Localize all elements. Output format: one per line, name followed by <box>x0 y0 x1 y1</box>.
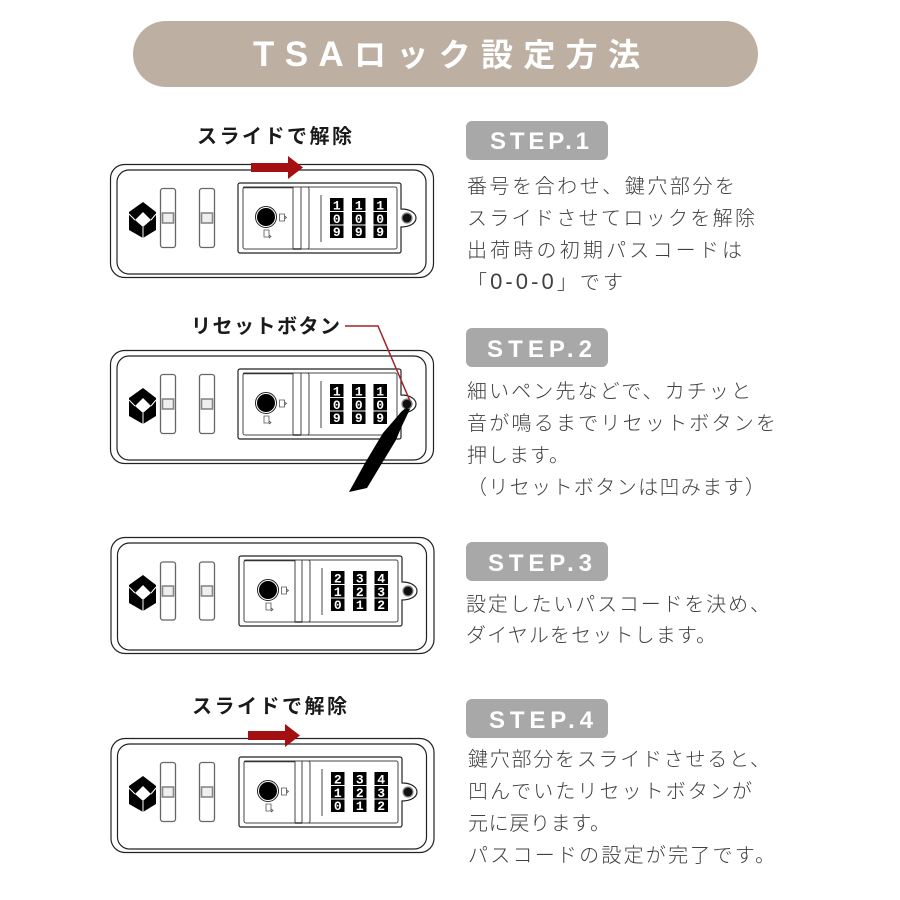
badge: step 1 <box>466 121 608 160</box>
text: step 2 instructions: 音が鳴るまでリセットボタンを <box>467 412 776 435</box>
lock diagram 4: 0 <box>334 799 342 814</box>
lock diagram 3: 3 <box>377 585 385 600</box>
label: slide to release: スライドで解除 <box>197 125 352 148</box>
lock diagram 1: 0 <box>355 212 363 227</box>
lock diagram 1: 0 <box>376 212 384 227</box>
text: step 4 instructions: 鍵穴部分をスライドさせると、 <box>468 748 770 771</box>
text: step 4 instructions <box>468 748 775 867</box>
panel: step 1 illustration <box>110 125 434 278</box>
text: step 2 instructions <box>467 380 776 499</box>
lock diagram 2: 0 <box>333 398 341 413</box>
badge: step 2: STEP.2 <box>487 336 592 363</box>
badge: step 3: STEP.3 <box>488 550 592 577</box>
lock diagram 1: 0 <box>333 212 341 227</box>
lock diagram 3: 1 <box>334 585 342 600</box>
lock diagram 3: 4 <box>377 572 385 586</box>
lock diagram 1: 9 <box>333 225 341 240</box>
text: step 3 instructions <box>466 593 770 647</box>
text: step 4 instructions: パスコードの設定が完了です。 <box>468 844 775 867</box>
text: step 1 instructions: スライドさせてロックを解除 <box>467 207 755 230</box>
text: step 1 instructions: 「0-0-0」です <box>467 269 623 294</box>
text: step 4 instructions: 凹んでいたリセットボタンが <box>468 780 752 803</box>
lock diagram 3: 0 <box>334 598 342 613</box>
text: step 2 instructions: 細いペン先などで、カチッと <box>467 380 751 403</box>
text: step 2 instructions: （リセットボタンは凹みます） <box>467 477 765 499</box>
lock diagram 2: 1 <box>355 384 363 400</box>
lock diagram 3: 3 <box>356 572 364 586</box>
lock diagram 4: 1 <box>356 799 364 814</box>
lock diagram 1: 1 <box>333 198 341 214</box>
text: step 2 instructions: 押します。 <box>467 444 569 467</box>
lock diagram 4: 2 <box>334 772 342 788</box>
label: reset button: リセットボタン <box>191 315 340 338</box>
title banner <box>133 21 758 87</box>
text: step 1 instructions: 出荷時の初期パスコードは <box>467 239 742 262</box>
text: step 1 instructions: 番号を合わせ、鍵穴部分を <box>467 175 735 198</box>
lock diagram 4 <box>111 738 434 852</box>
lock diagram 2: 9 <box>376 411 384 426</box>
badge: step 3 <box>466 542 608 581</box>
text: step 1 instructions <box>467 175 755 294</box>
callout line: reset button <box>345 326 410 401</box>
lock diagram 2: 0 <box>355 398 363 413</box>
badge: step 1: STEP.1 <box>490 128 589 155</box>
lock diagram 2: 9 <box>333 411 341 426</box>
text: step 3 instructions: ダイヤルをセットします。 <box>466 624 716 647</box>
lock diagram 4: 1 <box>334 786 342 801</box>
lock diagram 4: 4 <box>377 772 385 788</box>
lock diagram 2 <box>110 350 434 464</box>
lock diagram 4: 3 <box>377 786 385 801</box>
badge: step 2 <box>466 328 608 367</box>
text: step 4 instructions: 元に戻ります。 <box>468 813 610 835</box>
lock diagram 3: 2 <box>377 598 385 613</box>
arrow: slide direction <box>251 156 303 179</box>
text: step 3 instructions: 設定したいパスコードを決め、 <box>466 593 770 616</box>
lock diagram 3 <box>111 538 434 654</box>
lock diagram 3: 1 <box>356 598 364 613</box>
lock diagram 2: 1 <box>333 384 341 400</box>
icon: pen tip pressing reset button <box>349 408 410 492</box>
lock diagram 3: 2 <box>334 572 342 586</box>
lock diagram 2: 9 <box>355 411 363 426</box>
lock diagram 1: 1 <box>376 198 384 214</box>
arrow: slide direction <box>248 724 300 747</box>
lock diagram 1: 9 <box>355 225 363 240</box>
panel: step 3 illustration <box>111 538 434 654</box>
lock diagram 1 <box>110 164 434 278</box>
lock diagram 4: 3 <box>356 772 364 788</box>
lock diagram 3: 2 <box>356 585 364 600</box>
lock diagram 4: 2 <box>377 799 385 814</box>
lock diagram 2: 0 <box>376 398 384 413</box>
lock diagram 4: 2 <box>356 786 364 801</box>
lock diagram 1: 1 <box>355 198 363 214</box>
badge: step 4 <box>466 699 608 738</box>
lock diagram 2: 1 <box>376 384 384 400</box>
panel: step 2 illustration <box>110 315 434 492</box>
panel: step 4 illustration <box>111 695 434 852</box>
label: slide to release: スライドで解除 <box>192 695 347 718</box>
lock diagram 1: 9 <box>376 225 384 240</box>
title banner: TSA ロック設定方法 <box>253 35 640 74</box>
badge: step 4: STEP.4 <box>489 707 594 734</box>
